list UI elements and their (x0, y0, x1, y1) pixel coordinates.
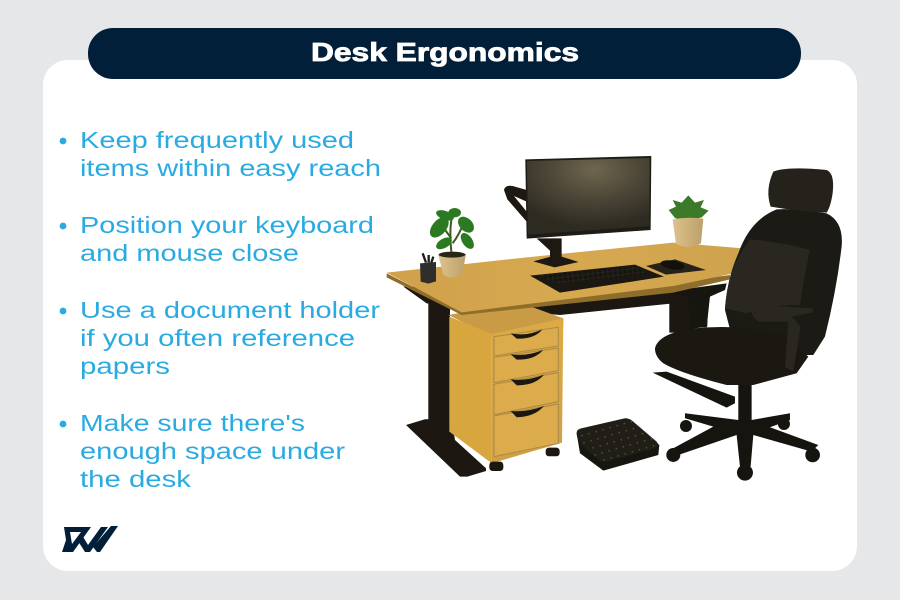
bullet: keyboard and mouse (60, 212, 374, 266)
bullet: document holder: papers (80, 353, 170, 379)
chair back (725, 209, 842, 355)
panel: white card (43, 60, 857, 571)
bullet: document holder: Use a document holder (80, 297, 380, 323)
bullet: space under desk: enough space under (80, 438, 345, 464)
desk legs (403, 287, 708, 477)
chair base (653, 372, 820, 481)
drawer cabinet (448, 305, 563, 471)
monitor arm and stand (504, 186, 579, 267)
title banner: Desk Ergonomics (311, 37, 579, 67)
bullet: space under desk: Make sure there's (80, 410, 305, 436)
monitor (525, 156, 651, 239)
chair (653, 168, 842, 481)
keyboard (530, 265, 664, 293)
bullet: keyboard and mouse: and mouse close (80, 240, 299, 266)
potted plant: right (669, 195, 709, 247)
mouse and mouse pad (646, 259, 706, 275)
bullet: keep items within reach (60, 127, 381, 181)
bullet: keep items within reach: items within easy reach (80, 155, 381, 181)
bullet: space under desk: the desk (80, 466, 192, 492)
potted plant: left (426, 208, 477, 277)
bullet: keyboard and mouse: Position your keyboard (80, 212, 374, 238)
title banner (88, 28, 801, 79)
desk top (387, 243, 743, 315)
bullet: space under desk (60, 410, 345, 492)
headrest (768, 168, 833, 213)
chair arm left (673, 283, 727, 327)
icon: logo (62, 526, 118, 552)
chair arm right (752, 306, 813, 372)
illustration: desk setup (387, 156, 842, 481)
bullet: keep items within reach: Keep frequently used (80, 127, 354, 153)
bullet list (60, 127, 381, 492)
footrest (577, 418, 659, 471)
bullet: document holder (60, 297, 380, 379)
lumbar cushion (725, 239, 810, 313)
bullet: document holder: if you often reference (80, 325, 355, 351)
seat (655, 327, 808, 385)
pen holder (420, 253, 436, 284)
